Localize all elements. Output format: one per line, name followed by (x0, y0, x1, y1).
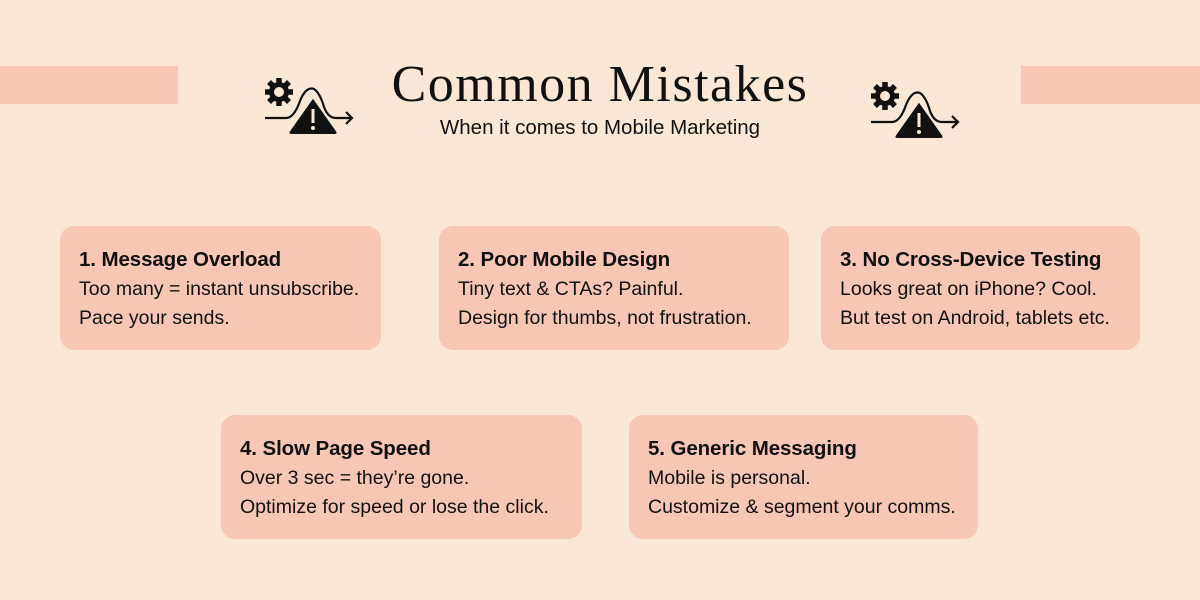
card 2: Tiny text & CTAs? Painful. (458, 278, 683, 300)
icon: gear warning left (265, 78, 354, 134)
card 3: 3. No Cross-Device Testing (840, 248, 1101, 271)
card 5 (629, 415, 978, 539)
card 1 (60, 226, 381, 350)
title: Common Mistakes (392, 56, 808, 113)
card 1: 1. Message Overload (79, 248, 281, 271)
card 1: Too many = instant unsubscribe. (79, 278, 359, 300)
card 1: Pace your sends. (79, 307, 230, 329)
card 4: 4. Slow Page Speed (240, 437, 431, 460)
card 2: Design for thumbs, not frustration. (458, 307, 752, 329)
card 4: Over 3 sec = they’re gone. (240, 467, 469, 489)
card 2: 2. Poor Mobile Design (458, 248, 670, 271)
card 4 (221, 415, 582, 539)
card 5: Customize & segment your comms. (648, 496, 956, 518)
card 3: But test on Android, tablets etc. (840, 307, 1110, 329)
card 5: Mobile is personal. (648, 467, 811, 489)
card 4: Optimize for speed or lose the click. (240, 496, 549, 518)
card 5: 5. Generic Messaging (648, 437, 857, 460)
card 3: Looks great on iPhone? Cool. (840, 278, 1097, 300)
card 3 (821, 226, 1140, 350)
icon: gear warning right (871, 82, 960, 138)
card 2 (439, 226, 789, 350)
subtitle: When it comes to Mobile Marketing (440, 116, 760, 139)
